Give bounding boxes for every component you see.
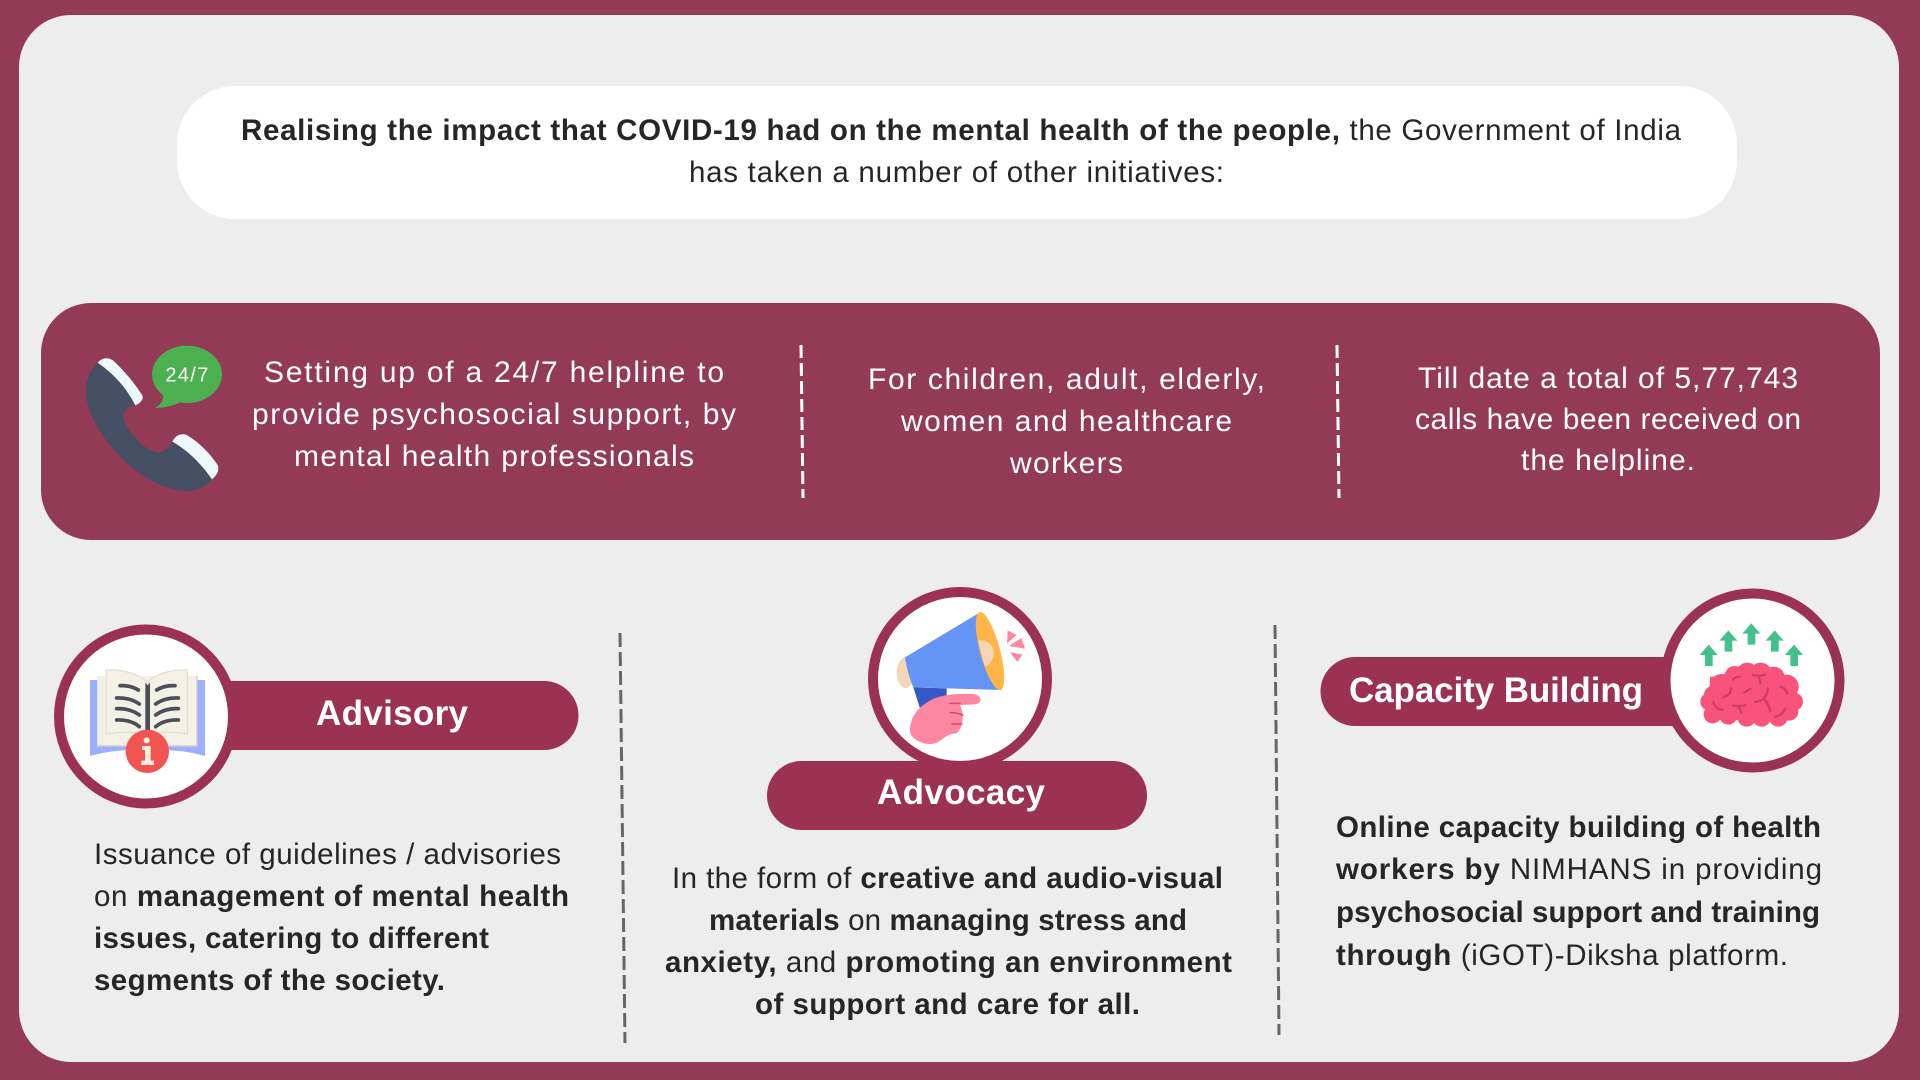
helpline text [252,356,736,473]
capacity building text [1335,811,1822,972]
advisory heading pill [210,681,578,750]
advocacy text: of support and care for all. [755,988,1140,1021]
intro panel: Realising the impact that COVID-19 had on the mental health of the people, the Government of India [241,114,1682,147]
capacity building text: workers by NIMHANS in providing [1335,853,1822,886]
advocacy heading pill: Advocacy [877,773,1046,812]
helpline text: mental health professionals [294,440,694,473]
icon: phone with 24/7 bubble: 24/7 [165,365,208,387]
advisory text [94,838,569,997]
intro panel [177,86,1737,219]
calls received text: Till date a total of 5,77,743 [1418,362,1798,395]
icon: megaphone in hand [897,609,1025,744]
capacity building text: psychosocial support and training [1336,896,1820,929]
audience text: workers [1009,447,1123,480]
advocacy text: In the form of creative and audio-visual [672,862,1223,895]
panel: capacity building [1320,594,1840,972]
helpline text: provide psychosocial support, by [252,398,736,431]
audience text [868,363,1265,480]
icon: brain with arrows [1700,623,1803,727]
advocacy text [665,862,1232,1021]
icon: phone with 24/7 bubble [86,346,222,491]
advisory text: Issuance of guidelines / advisories [94,838,561,871]
advocacy text: anxiety, and promoting an environment [665,946,1232,979]
capacity building text: through (iGOT)-Diksha platform. [1336,939,1788,972]
capacity building text: Online capacity building of health [1336,811,1821,844]
capacity building heading pill [1320,657,1700,726]
advisory text: issues, catering to different [94,922,489,955]
calls received text: the helpline. [1521,444,1695,477]
advocacy heading pill [767,761,1147,830]
audience text: women and healthcare [900,405,1232,438]
panel: helpline band [41,303,1880,540]
icon: open book with info badge [90,670,205,773]
panel: advisory [59,630,578,997]
advisory text: segments of the society. [94,964,445,997]
advisory text: on management of mental health [94,880,569,913]
panel: advocacy [665,592,1232,1021]
calls received text: calls have been received on [1415,403,1801,436]
advocacy text: materials on managing stress and [709,904,1187,937]
calls received text [1415,362,1801,477]
intro panel: has taken a number of other initiatives: [689,156,1224,189]
audience text: For children, adult, elderly, [868,363,1265,396]
capacity building heading pill: Capacity Building [1349,671,1643,710]
helpline text: Setting up of a 24/7 helpline to [264,356,724,389]
advisory heading pill: Advisory [316,694,469,733]
